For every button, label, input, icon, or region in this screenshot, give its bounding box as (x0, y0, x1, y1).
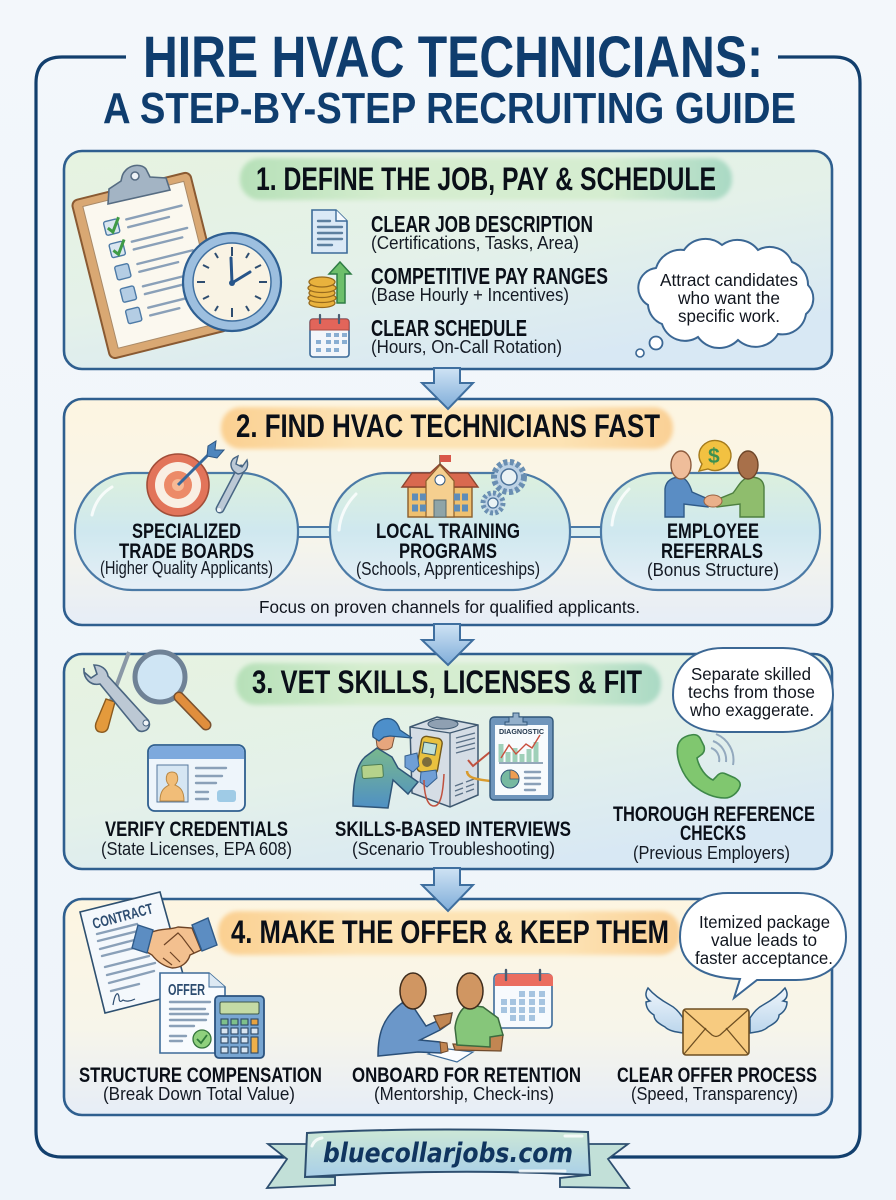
icon: wrench, screwdriver and magnifier (84, 652, 206, 732)
icon: technician testing AC unit (353, 713, 553, 808)
item: onboard for retention (352, 1064, 581, 1104)
callout: itemized package: value leads to (711, 930, 817, 950)
icon: handshake (132, 918, 217, 968)
item: verify credentials: (State Licenses, EPA 608) (101, 839, 292, 859)
callout: separate skilled techs (673, 648, 833, 732)
icon: contract (80, 892, 188, 1013)
channel: employee referrals: (Bonus Structure) (647, 560, 779, 580)
item: thorough reference checks: (Previous Employers) (633, 843, 790, 863)
heading: step 4: 4. MAKE THE OFFER & KEEP THEM (231, 914, 669, 950)
item: onboard for retention: ONBOARD FOR RETENTION (352, 1064, 581, 1087)
item: clear job description: (Certifications, Tasks, Area) (371, 233, 579, 253)
panel: step 1 define the job (64, 151, 832, 369)
item: competitive pay ranges: COMPETITIVE PAY RANGES (371, 263, 608, 289)
channel: employee referrals: EMPLOYEE (667, 520, 759, 543)
title (103, 25, 796, 133)
channel: specialized trade boards: (Higher Quality Applicants) (100, 558, 273, 578)
arrow: step 1 to 2 (422, 368, 473, 409)
icon: contract: CONTRACT (91, 900, 155, 933)
item: clear job description (312, 210, 593, 253)
title: A STEP-BY-STEP RECRUITING GUIDE (103, 84, 796, 133)
title: HIRE HVAC TECHNICIANS: (143, 25, 763, 90)
callout: thought cloud: specific work. (678, 306, 780, 326)
item: clear schedule (310, 315, 562, 357)
icon: mentor and new hire (378, 970, 553, 1062)
channel: employee referrals: REFERRALS (661, 540, 763, 563)
item: structure compensation (79, 1064, 322, 1104)
channel: local training programs: (Schools, Apprenticeships) (356, 559, 540, 579)
item: competitive pay ranges: (Base Hourly + Incentives) (371, 285, 569, 305)
text: focus note: Focus on proven channels for qualified applicants. (259, 597, 640, 617)
icon: clock (183, 233, 281, 331)
icon: target and wrench (147, 441, 248, 516)
heading: step 3: 3. VET SKILLS, LICENSES & FIT (252, 664, 642, 700)
icon: clipboard with checklist (71, 165, 229, 359)
channel: local training programs: LOCAL TRAINING (376, 520, 520, 543)
item: onboard for retention: (Mentorship, Check-ins) (374, 1084, 554, 1104)
callout: thought cloud: Attract candidates (660, 270, 798, 290)
item: competitive pay ranges (308, 262, 608, 308)
item: thorough reference checks: CHECKS (680, 822, 746, 845)
channel: specialized trade boards (75, 441, 298, 590)
icon: handshake with dollar bubble (665, 441, 764, 517)
callout: separate skilled techs: Separate skilled (691, 664, 811, 684)
icon: offer letter: OFFER (168, 982, 205, 999)
callout: separate skilled techs: techs from those (688, 682, 815, 702)
connectors between channels (296, 527, 603, 537)
icon: technician testing AC unit: DIAGNOSTIC (499, 727, 545, 736)
heading: step 2: 2. FIND HVAC TECHNICIANS FAST (236, 408, 660, 444)
icon: calculator (215, 996, 264, 1058)
item: structure compensation: (Break Down Total Value) (103, 1084, 295, 1104)
heading: step 4 (218, 911, 680, 955)
callout: itemized package (680, 893, 846, 998)
item: verify credentials: VERIFY CREDENTIALS (105, 818, 288, 841)
channel: local training programs (330, 455, 570, 590)
item: clear schedule: CLEAR SCHEDULE (371, 315, 527, 341)
channel: employee referrals (601, 441, 820, 590)
arrow: step 2 to 3 (422, 624, 473, 665)
icon: school and gears (402, 455, 524, 517)
panel: step 4 make the offer (64, 892, 846, 1115)
item: clear offer process: CLEAR OFFER PROCESS (617, 1064, 817, 1087)
item: clear offer process: (Speed, Transparency) (631, 1084, 798, 1104)
channel: specialized trade boards: TRADE BOARDS (119, 540, 254, 563)
panel: step 2 find technicians (64, 399, 832, 625)
callout: itemized package: faster acceptance. (695, 948, 833, 968)
icon: handshake with dollar bubble: $ (708, 445, 720, 468)
item: skills-based interviews: SKILLS-BASED INTERVIEWS (335, 818, 571, 841)
callout: thought cloud (636, 239, 813, 357)
channel: local training programs: PROGRAMS (399, 540, 497, 563)
icon: offer letter (160, 973, 225, 1053)
heading: step 1: 1. DEFINE THE JOB, PAY & SCHEDULE (256, 161, 716, 197)
heading: step 1 (240, 158, 732, 200)
item: structure compensation: STRUCTURE COMPENSATION (79, 1064, 322, 1087)
item: thorough reference checks: THOROUGH REFERENCE (613, 803, 815, 826)
item: skills-based interviews: (Scenario Troubleshooting) (352, 839, 555, 859)
item: skills-based interviews (335, 818, 571, 859)
panel: step 3 vet skills (64, 648, 833, 869)
item: verify credentials (101, 818, 292, 859)
item: clear job description: CLEAR JOB DESCRIPTION (371, 211, 593, 237)
callout: itemized package: Itemized package (699, 912, 830, 932)
item: thorough reference checks (613, 803, 815, 863)
arrow: step 3 to 4 (422, 868, 473, 911)
icon: ID card (148, 745, 245, 811)
icon: telephone (677, 734, 740, 798)
channel: specialized trade boards: SPECIALIZED (132, 520, 241, 543)
callout: separate skilled techs: who exaggerate. (689, 700, 814, 720)
item: clear offer process (617, 1064, 817, 1104)
footer ribbon: bluecollarjobs.com (267, 1130, 629, 1188)
item: clear schedule: (Hours, On-Call Rotation) (371, 337, 562, 357)
icon: winged envelope (646, 988, 787, 1055)
footer ribbon: bluecollarjobs.com: bluecollarjobs.com (323, 1138, 573, 1169)
callout: thought cloud: who want the (677, 288, 780, 308)
